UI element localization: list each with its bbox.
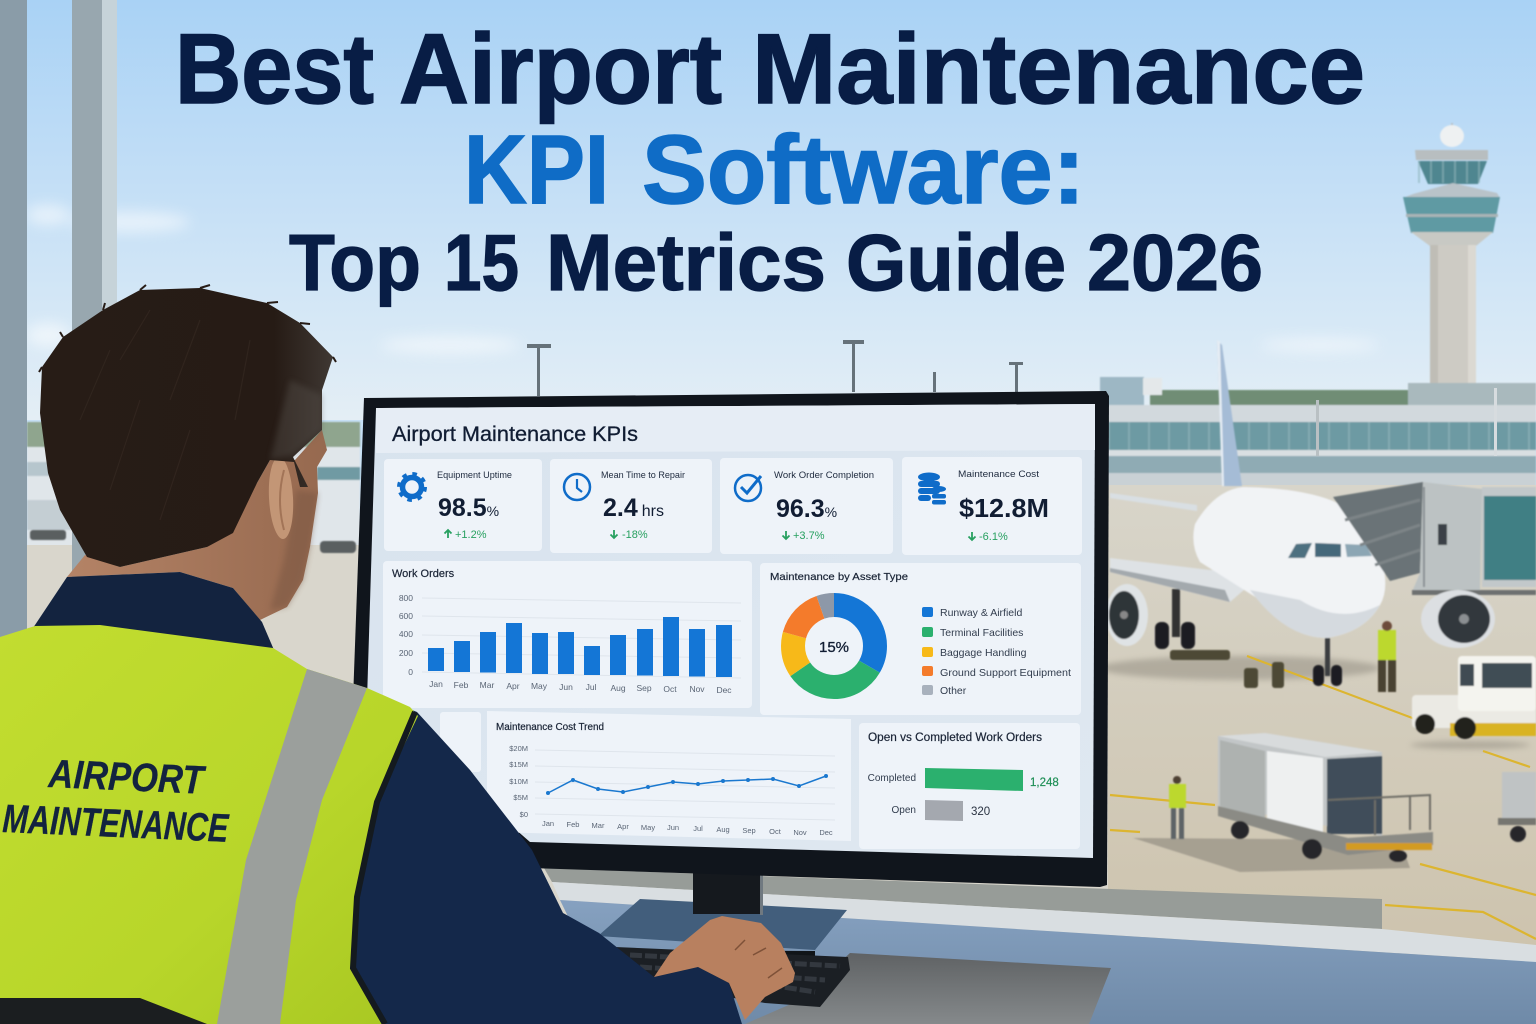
title line 1: Maintenance (752, 13, 1365, 124)
month labels (542, 819, 833, 837)
month labels: May (641, 823, 655, 832)
y axis labels (399, 593, 413, 677)
month labels: Mar (592, 821, 605, 830)
window mullions (0, 0, 117, 640)
icon: gear (399, 474, 425, 500)
trend line (546, 774, 828, 795)
month labels: Jun (667, 823, 679, 832)
title line 3: 15 (444, 218, 519, 307)
KPI card: equipment uptime: Equipment Uptime (437, 470, 512, 481)
y axis labels: $15M (509, 760, 528, 769)
dashboard title (376, 404, 1095, 453)
panel: open vs completed work orders: Completed (868, 773, 916, 784)
month labels: Jan (429, 679, 443, 689)
y axis labels: $10M (509, 777, 528, 786)
month labels: Dec (716, 685, 732, 695)
legend: Baggage Handling (940, 647, 1027, 659)
icon: clock (564, 474, 590, 500)
sill wall strip (544, 868, 1382, 929)
month labels: Jan (542, 819, 554, 828)
monitor (353, 391, 1109, 887)
KPI card: mean time to repair: Mean Time to Repair (601, 470, 685, 481)
panel: maintenance by asset type donut: Maintenance by Asset Type (770, 571, 908, 583)
month labels: May (531, 681, 548, 691)
icon: jet bridge (1333, 482, 1536, 595)
month labels: Nov (793, 828, 807, 837)
dashboard screen (367, 404, 1095, 858)
monitor bezel (353, 391, 1109, 887)
panel: work orders bar chart: Work Orders (392, 568, 455, 580)
month labels: Jul (586, 682, 597, 692)
KPI card: work order completion: 96.3% (776, 495, 837, 523)
airplane at gate (1106, 340, 1536, 688)
vest edge binding (353, 712, 415, 1024)
icon: coin stacks (918, 472, 946, 504)
KPI card: equipment uptime: +1.2% (455, 529, 487, 541)
KPI card: equipment uptime (384, 459, 542, 551)
KPI card: work order completion (720, 458, 893, 554)
background: light poles (527, 340, 1497, 456)
title line 1: Best (175, 13, 374, 124)
vest text: MAINTENANCE (2, 797, 230, 851)
legend: Other (940, 685, 967, 697)
icon: nose landing gear (1313, 638, 1342, 686)
y axis labels: 400 (399, 629, 413, 639)
vest text (2, 752, 230, 851)
title line 2: KPI (464, 115, 609, 224)
hair (39, 285, 336, 567)
y axis labels: 800 (399, 593, 413, 603)
background: apron ground (27, 485, 1536, 1024)
KPI card: work order completion: +3.7% (793, 530, 825, 542)
KPI card: maintenance cost: Maintenance Cost (958, 469, 1039, 480)
title line 3: Metrics (546, 218, 826, 307)
month labels (429, 679, 732, 695)
safety vest (0, 625, 418, 1024)
panel: partly hidden card (440, 712, 481, 772)
apron: shadows and yellow ground markings (1100, 656, 1536, 939)
panel: maintenance cost trend line chart: Maintenance Cost Trend (496, 722, 604, 733)
stubble shading (270, 490, 318, 610)
dashboard title: Airport Maintenance KPIs (392, 423, 638, 446)
title line 1: Airport (399, 13, 722, 124)
legend: Runway & Airfield (940, 607, 1022, 619)
KPI card: work order completion: Work Order Completion (774, 470, 874, 481)
legend: Terminal Facilities (940, 627, 1023, 639)
title line 2: Software: (642, 115, 1085, 224)
desk (552, 882, 1536, 1024)
panel: open vs completed work orders: 320 (971, 806, 990, 818)
vest text: AIRPORT (47, 752, 207, 803)
hand on keyboard (654, 916, 795, 1020)
KPI card: equipment uptime: 98.5% (438, 494, 499, 522)
keyboard (615, 947, 850, 1007)
month labels: Oct (663, 684, 677, 694)
title (175, 13, 1365, 307)
panel: open vs completed work orders: 1,248 (1030, 777, 1059, 789)
panel: open vs completed work orders: Open (892, 805, 916, 816)
panel: maintenance cost trend line chart (487, 711, 851, 841)
KPI card: maintenance cost: $12.8M (959, 493, 1049, 523)
baggage cart vehicle (1133, 733, 1433, 872)
monitor stand (598, 868, 847, 958)
collar (33, 572, 274, 650)
ear (267, 456, 295, 540)
y axis labels: $5M (513, 793, 528, 802)
KPI card: mean time to repair: -18% (622, 529, 648, 541)
y axis labels (509, 744, 528, 819)
title line 3: Guide (846, 218, 1066, 307)
second baggage cart (1498, 772, 1536, 842)
desk mat (745, 953, 1111, 1024)
icon: right engine (1421, 590, 1495, 648)
person: worker seen from behind (0, 285, 795, 1024)
background: horizon trees and terminal building (27, 377, 1536, 547)
desk ledge (552, 882, 1536, 962)
background: control tower (1403, 123, 1500, 405)
y axis labels: 600 (399, 611, 413, 621)
small ground worker (1169, 776, 1186, 839)
month labels: Feb (454, 680, 469, 690)
month labels: Apr (617, 822, 629, 831)
bars (428, 617, 732, 677)
ground worker near aircraft (1378, 621, 1396, 692)
month labels: Nov (689, 684, 705, 694)
legend: Ground Support Equipment (940, 667, 1071, 679)
month labels: Apr (506, 681, 520, 691)
month labels: Feb (567, 820, 579, 829)
KPI card: maintenance cost: -6.1% (979, 531, 1008, 543)
month labels: Jul (693, 824, 703, 833)
neck and face (67, 430, 327, 620)
y axis labels: 0 (408, 667, 413, 677)
panel: open vs completed work orders (859, 723, 1080, 849)
panel: maintenance by asset type donut: 15% (819, 639, 849, 656)
title line 3: Top (289, 218, 421, 307)
sleeve and shoulder (340, 705, 742, 1024)
month labels: Oct (769, 827, 782, 836)
icon: main landing gear (1155, 589, 1195, 649)
title line 3: 2026 (1087, 218, 1263, 307)
reflective stripe (217, 669, 367, 1024)
month labels: Jun (559, 682, 573, 692)
month labels: Dec (819, 828, 833, 837)
icon: check circle (735, 475, 761, 501)
month labels: Sep (636, 683, 652, 693)
panel: maintenance by asset type donut (760, 563, 1081, 715)
KPI card: maintenance cost (902, 457, 1082, 555)
month labels: Aug (610, 683, 626, 693)
panel: work orders bar chart (383, 561, 752, 708)
y axis labels: 200 (399, 648, 413, 658)
chair back (0, 998, 207, 1024)
month labels: Aug (716, 825, 730, 834)
desk surface (560, 900, 1536, 1024)
panel: open vs completed work orders: Open vs Completed Work Orders (868, 732, 1042, 744)
icon: left engine (1106, 584, 1148, 646)
airport tug vehicle (1412, 656, 1536, 739)
KPI card: mean time to repair: 2.4hrs (603, 494, 664, 522)
month labels: Sep (742, 826, 756, 835)
y axis labels: $20M (509, 744, 528, 753)
donut chart (793, 605, 875, 687)
KPI card: mean time to repair (550, 459, 712, 553)
month labels: Mar (480, 680, 494, 690)
background: sky with clouds (0, 0, 1536, 420)
legend (922, 607, 1071, 697)
y axis labels: $0 (520, 810, 528, 819)
